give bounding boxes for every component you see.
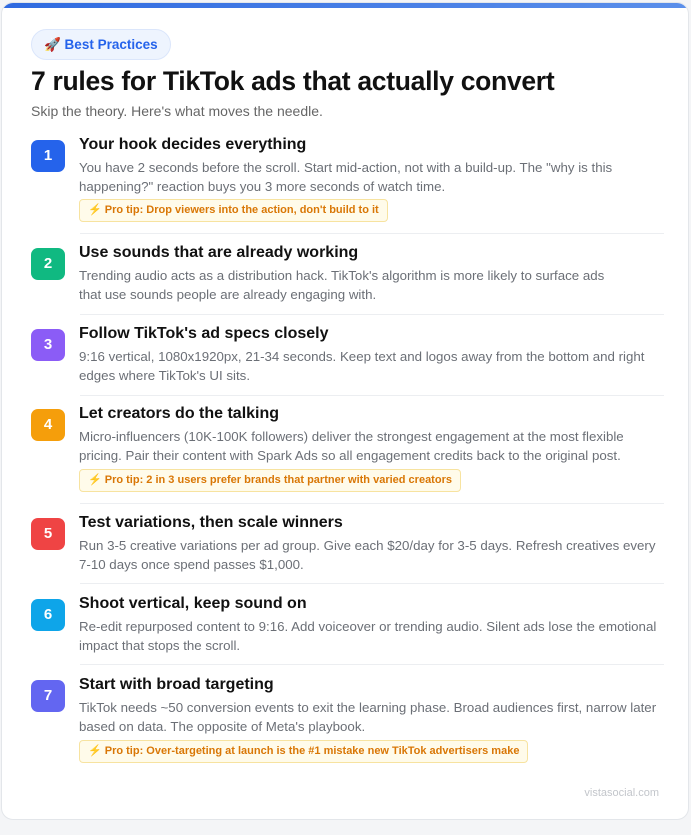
item 6: 6 xyxy=(44,606,52,623)
item 7: Start with broad targeting xyxy=(79,676,274,693)
item 3 xyxy=(31,325,644,383)
item 1: You have 2 seconds before the scroll. Start mid-action, not with a build-up. The "why is this happening?" reaction buys you 3 more seconds of watch time. xyxy=(79,160,612,194)
item 1: Your hook decides everything xyxy=(79,136,306,153)
tip 7 xyxy=(79,740,528,763)
tip 4 xyxy=(79,469,461,492)
item 4 xyxy=(31,405,624,492)
item 1: 1 xyxy=(44,147,52,164)
item 5 xyxy=(31,514,656,572)
tip 7: ⚡ Pro tip: Over-targeting at launch is the #1 mistake new TikTok advertisers make xyxy=(88,745,519,757)
item 3: 9:16 vertical, 1080x1920px, 21-34 seconds. Keep text and logos away from the bottom and right edges where TikTok's UI sits. xyxy=(79,349,644,383)
item 3: 3 xyxy=(44,336,52,353)
subtitle: Skip the theory. Here's what moves the needle. xyxy=(31,103,323,119)
item 2: Use sounds that are already working xyxy=(79,244,358,261)
item 2 xyxy=(31,244,604,302)
item 4: 4 xyxy=(44,416,52,433)
item 5: Test variations, then scale winners xyxy=(79,514,343,531)
item 4: Let creators do the talking xyxy=(79,405,279,422)
item 5: Run 3-5 creative variations per ad group. Give each $20/day for 3-5 days. Refresh creatives every 7-10 days once spend passes $1,000. xyxy=(79,538,656,572)
item 6 xyxy=(31,595,656,653)
item 1 xyxy=(31,136,612,222)
footer: vistasocial.com xyxy=(584,787,659,799)
item 2: 2 xyxy=(44,255,52,272)
item 3: Follow TikTok's ad specs closely xyxy=(79,325,329,342)
item 7 xyxy=(31,676,656,763)
item 7: TikTok needs ~50 conversion events to exit the learning phase. Broad audiences first, narrow later based on data. The opposite of Meta's playbook. xyxy=(79,700,656,734)
badge xyxy=(31,29,171,60)
item 4: Micro-influencers (10K-100K followers) deliver the strongest engagement at the most flexible pricing. Pair their content with Spark Ads so all engagement credits back to the original post. xyxy=(79,429,624,463)
tip 1: ⚡ Pro tip: Drop viewers into the action, don't build to it xyxy=(88,204,379,216)
item 6: Shoot vertical, keep sound on xyxy=(79,595,307,612)
tip 4: ⚡ Pro tip: 2 in 3 users prefer brands that partner with varied creators xyxy=(88,474,452,486)
tip 1 xyxy=(79,199,388,222)
item 6: Re-edit repurposed content to 9:16. Add voiceover or trending audio. Silent ads lose the emotional impact that stops the scroll. xyxy=(79,619,656,653)
title: 7 rules for TikTok ads that actually convert xyxy=(31,66,554,96)
item 2: Trending audio acts as a distribution hack. TikTok's algorithm is more likely to surface ads xyxy=(79,268,604,283)
item 5: 5 xyxy=(44,525,52,542)
item 7: 7 xyxy=(44,687,52,704)
badge: 🚀 Best Practices xyxy=(44,37,158,52)
item 2: that use sounds people are already engaging with. xyxy=(79,287,376,302)
